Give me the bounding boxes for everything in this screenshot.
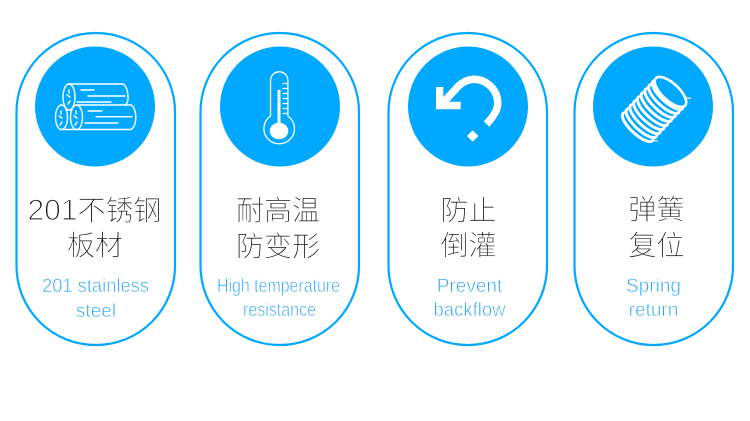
icon disc 4: [593, 46, 713, 166]
heading 2 second line: 防变形: [236, 231, 320, 262]
panel: 201 stainless steel: [16, 33, 175, 345]
english caption 3 second line: backflow: [434, 300, 506, 321]
capsule outline 3: [388, 33, 547, 345]
english caption 1: 201 stainless: [42, 276, 149, 297]
capsule outline 2: [200, 33, 359, 345]
icon: thermometer: [264, 72, 294, 144]
english caption 4 second line: return: [629, 300, 678, 321]
icon: stacked logs: [56, 84, 136, 130]
icon: coil spring: [618, 72, 694, 149]
english caption 3: Prevent: [437, 276, 503, 297]
english caption 1 second line: steel: [76, 301, 116, 322]
heading 4 second line: 复位: [628, 230, 685, 261]
heading 2: 耐高温: [236, 195, 320, 226]
icon disc 2: [220, 46, 340, 166]
heading 1 second line: 板材: [67, 230, 123, 261]
heading 3 second line: 倒灌: [440, 230, 497, 261]
english caption 2: High temperature: [217, 276, 340, 297]
panel: spring return: [574, 33, 733, 345]
heading 1: 201不锈钢: [27, 194, 162, 227]
english caption 4: Spring: [626, 276, 681, 297]
capsule outline 1: [16, 33, 175, 345]
capsule outline 4: [574, 33, 733, 345]
panel: prevent backflow: [388, 33, 547, 345]
icon disc 3: [408, 46, 528, 166]
icon: return arrow: [436, 79, 498, 142]
panel: high temperature resistance: [200, 33, 359, 345]
icon disc 1: [35, 46, 155, 166]
heading 3: 防止: [440, 195, 497, 226]
english caption 2 second line: resistance: [243, 300, 316, 321]
heading 4: 弹簧: [628, 194, 685, 225]
